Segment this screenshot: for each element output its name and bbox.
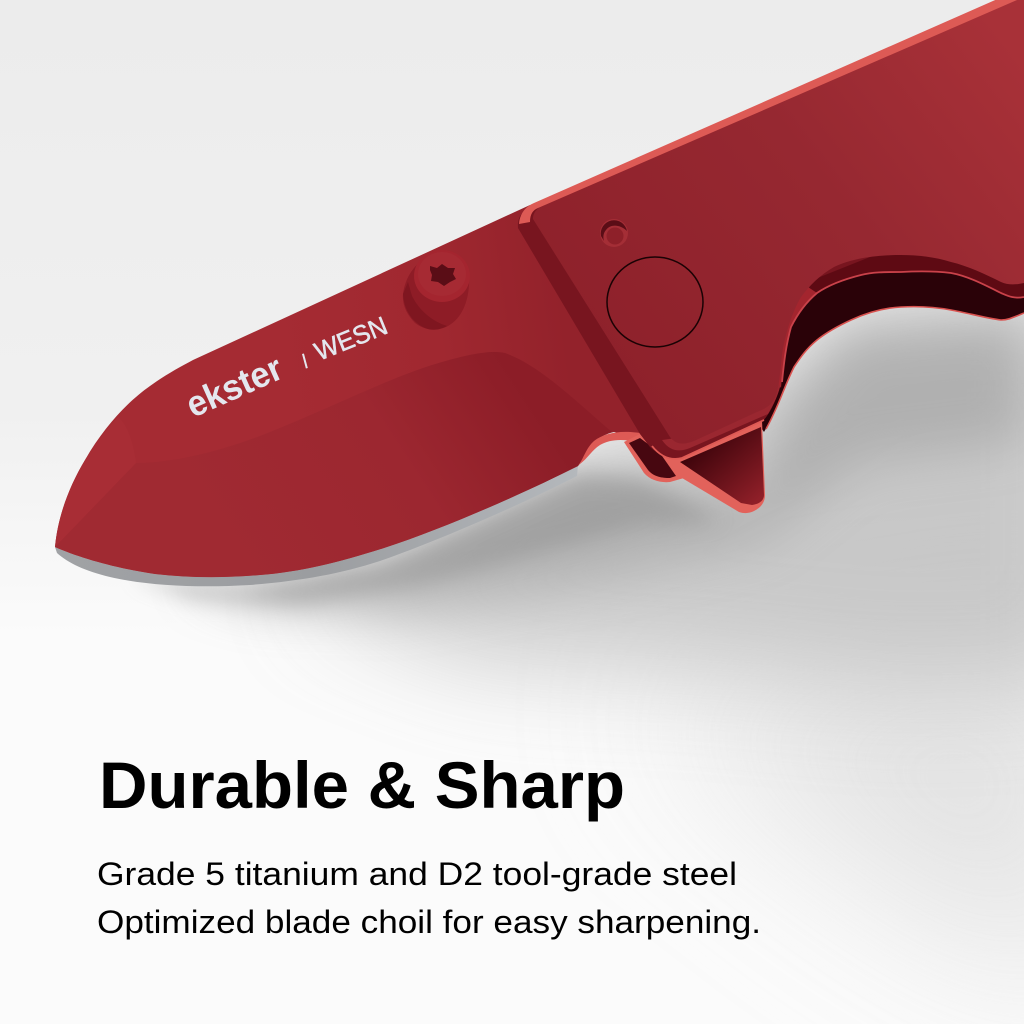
body text	[97, 856, 761, 940]
detent hole	[600, 219, 628, 247]
handle top edge highlight	[519, 0, 1024, 224]
knife	[55, 0, 1024, 586]
handle lower bevel	[662, 370, 783, 450]
finger choil left bevel	[776, 285, 817, 388]
pivot circle	[607, 257, 703, 347]
blade tip bevel	[55, 417, 136, 547]
thumb stud	[403, 250, 470, 330]
blade logo	[180, 310, 392, 425]
handle base	[518, 0, 1024, 459]
steel cutting edge	[55, 464, 578, 586]
finger choil edge highlight	[782, 271, 1024, 382]
blade choil lip	[578, 432, 650, 466]
rear tang	[624, 434, 684, 482]
cavity lower edge	[766, 307, 1024, 429]
blade body	[55, 205, 650, 577]
hollow grind	[55, 352, 612, 577]
finger choil bevel	[800, 245, 1024, 298]
torx star	[430, 264, 456, 286]
body text: Optimized blade choil for easy sharpening.	[97, 904, 761, 940]
separator	[302, 353, 308, 368]
handle main face	[533, 0, 1024, 444]
title: Durable & Sharp	[99, 748, 625, 822]
handle lower edge highlight	[652, 420, 764, 459]
ekster wordmark: ekster	[180, 347, 289, 425]
finger choil inner cavity	[756, 262, 1024, 432]
WESN wordmark: WESN	[310, 310, 392, 367]
cast shadow	[130, 300, 1024, 1000]
flipper tab	[680, 420, 765, 513]
body text: Grade 5 titanium and D2 tool-grade steel	[97, 856, 737, 892]
